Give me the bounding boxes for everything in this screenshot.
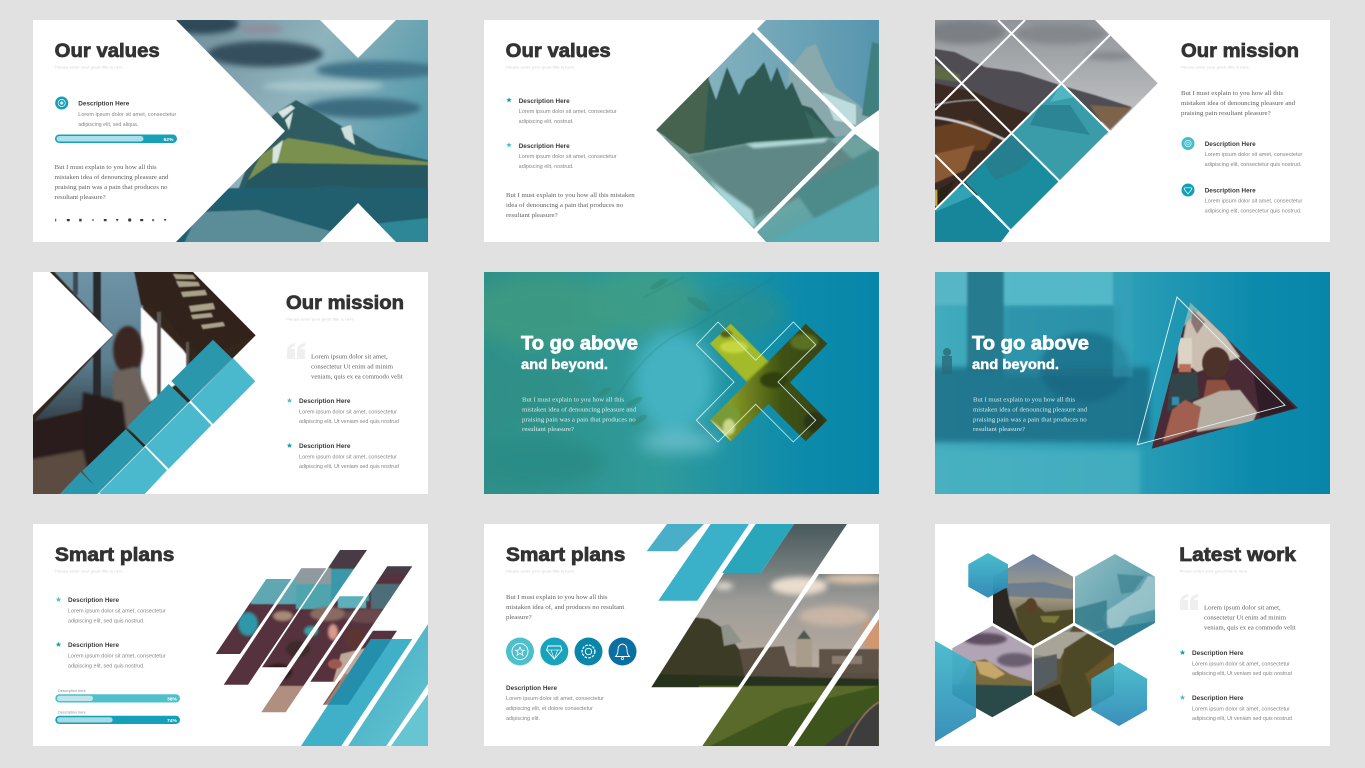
description block two: Description Here [299,443,351,450]
body paragraph [522,396,637,433]
description block one: Description Here [519,98,570,105]
panel: Our values slide with X photo [33,20,428,242]
description block two: adipiscing elit, Ut veniam sed quis nostrud [299,464,399,470]
photo: woman by window [28,267,260,499]
subtitle: Please enter your great title is here [506,568,575,574]
description block one: Description Here [1192,650,1244,657]
background: blurred cafe [925,267,1330,500]
description block one: adipiscing elit, Ut veniam sed quis nostrud [299,419,399,425]
title: Smart plans [506,544,625,566]
triangle outline [1137,297,1285,445]
photo: road and hills in diamond grid [925,15,1162,242]
subtitle: Please enter your great title is here [1180,568,1248,574]
body paragraph: mistaken idea of denouncing pleasure and [1181,100,1296,107]
icon: diamond circle [540,638,568,666]
panel: To go above slide with leaf X [484,272,879,494]
description block two: Lorem ipsum dolor sit amet, consectetur [519,154,617,160]
progress bar 38%: Description here [58,689,86,693]
photo: man with phone in triangle [1152,302,1298,449]
description block two: Description Here [519,143,570,150]
description block one: Lorem ipsum dolor sit amet, consectetur [1192,662,1290,668]
description block [506,685,604,722]
blue parallelograms [647,524,794,601]
quote text: consectetur Ut enim ad minim [311,364,394,370]
icon: star [506,142,512,147]
panel: Smart plans slide with town photo and icon row [484,524,879,746]
body paragraph: But I must explain to you how all this mistaken [506,192,635,199]
subtitle: Please enter your great title is here [55,64,124,70]
heading: To go above [521,332,638,354]
description block one [1192,650,1292,677]
body paragraph [506,192,635,219]
subtitle: Please enter your great title is here [55,568,124,574]
body paragraph [506,594,624,621]
icon: gear circle [574,638,602,666]
quote text: veniam, quis ex ea commodo velit [311,374,403,380]
icon: star [287,443,292,448]
photo hexagon: coast [1032,624,1117,720]
photo: mountain in X cut-out [176,20,428,242]
title: Our mission [1181,40,1299,62]
body paragraph: praising pain was a pain that produces no [522,416,636,424]
overlap of blue strip and photo [328,639,392,705]
body paragraph: pleasure? [506,614,532,621]
photo hexagon: teal stairs [1073,552,1158,648]
body paragraph [973,396,1088,433]
icon: star [287,398,292,403]
icon: star [1180,650,1185,655]
description block one: Lorem ipsum dolor sit amet, consectetur [299,410,397,416]
heading: To go above [972,332,1089,354]
description block [78,101,177,128]
quote text [311,354,403,380]
blue cells over the photo [60,340,232,494]
heading [972,332,1089,372]
panel: To go above slide with triangle photo [935,272,1330,494]
blue hexagon right [1091,662,1147,726]
description block two: adipiscing elit, nostrud. [519,164,574,170]
description block one: adipiscing elit, sed quis nostrud. [68,618,145,624]
X outline [696,322,816,442]
body paragraph: resultant pleasure? [55,194,106,201]
body paragraph: But I must explain to you how all this [522,396,624,404]
photo: town at sunset in slanted strips [644,519,886,750]
photo: cafe in slanted strips [216,550,412,712]
description block: Description Here [78,101,130,108]
icon: star [56,597,61,602]
progress bar 74%: 74% [167,718,177,723]
progress bar 74%: Description here [58,710,86,714]
panel: Our values slide with diamond photo [484,20,879,242]
panel: Our mission slide with woman photo and quote [33,272,428,494]
description block two: Lorem ipsum dolor sit amet, consectetur [68,654,166,660]
description block two: adipiscing elit, Ut veniam sed quis nostrud [1192,716,1292,722]
description block two: Lorem ipsum dolor sit amet, consectetur [1192,706,1290,712]
progress bar 62% [55,134,177,143]
description block one [299,398,399,425]
body paragraph: But I must explain to you how all this [973,396,1075,404]
body paragraph: But I must explain to you how all this [506,594,608,601]
body paragraph: praising pain resultant pleasure? [1181,110,1271,117]
progress bar 38% [55,689,180,702]
subtitle: Please enter your great title is here [1181,64,1250,70]
title: Smart plans [55,544,174,566]
teal overlay cells [935,84,1109,242]
description block two [1205,188,1303,214]
description block one: adipiscing elit, Ut veniam sed quis nostrud [1192,671,1292,677]
description block two [68,642,166,669]
description block one: Lorem ipsum dolor sit amet, consectetur [68,608,166,614]
icon: star [1180,695,1185,700]
description block two: adipiscing elit, sed quis nostrud. [68,663,145,669]
body paragraph: idea of denouncing a pain that produces no [506,202,624,209]
description block: Lorem ipsum dolor sit amet, consectetur [506,696,604,702]
quote text: Lorem ipsum dolor sit amet, [1204,604,1281,612]
description block one [68,597,166,624]
quote text [1204,604,1296,632]
description block one: Lorem ipsum dolor sit amet, consectetur [519,109,617,115]
body paragraph: resultant pleasure? [973,426,1025,433]
description block: adipiscing elit. [506,716,540,722]
heading: and beyond. [972,356,1059,372]
quote text: Lorem ipsum dolor sit amet, [311,354,388,360]
subtitle: Please enter your great title is here [506,64,575,70]
description block two [299,443,399,470]
subtitle: Please enter your great title is here [286,316,355,322]
body paragraph: mistaken idea of denouncing pleasure and [973,406,1088,414]
description block two: Lorem ipsum dolor sit amet, consectetur [1205,198,1303,204]
photo: forest and mountain in diamond cut-out [649,15,884,246]
body paragraph: resultant pleasure? [522,426,574,433]
description block: Lorem ipsum dolor sit amet, consectetur [78,112,177,118]
progress bar 74% [55,710,180,724]
description block two: Description Here [1205,188,1256,194]
description block: adipiscing elit, et dolore consectetur [506,706,593,712]
description block one: Lorem ipsum dolor sit amet, consectetur [1205,152,1303,158]
heading: and beyond. [521,356,608,372]
body paragraph: mistaken idea of, and produces no resultant [506,604,624,611]
body paragraph: praising pain was a pain that produces no [55,184,168,191]
heading [521,332,638,372]
progress bar 62%: 62% [164,137,174,142]
description block one: Description Here [299,398,351,405]
title: Our values [506,40,611,62]
title: Latest work [1179,544,1296,566]
photo: leaves in X shape [710,324,828,442]
icon: quote mark [287,343,305,359]
photo hexagon: canyon [990,552,1075,648]
description block: Description Here [506,685,557,692]
description block two [519,143,617,170]
description block two: Description Here [68,642,119,649]
body paragraph: resultant pleasure? [506,212,558,219]
body paragraph [55,164,169,201]
icon: quote mark [1180,594,1198,610]
description block two: Lorem ipsum dolor sit amet, consectetur [299,454,397,460]
quote text: veniam, quis ex ea commodo velit [1204,624,1296,632]
body paragraph: But I must explain to you how all this [55,164,157,171]
description block one: Description Here [1205,141,1256,148]
body paragraph: praising pain was a pain that produces no [973,416,1087,424]
body paragraph [1181,90,1296,117]
quote text: consectetur Ut enim ad minim [1204,614,1287,622]
description block one: Description Here [68,597,119,604]
description block two [1192,695,1292,722]
blue slanted strips [301,624,428,746]
panel: Smart plans slide with photo strips and bars [33,524,428,746]
white grid lines [935,20,1125,242]
panel: Our mission slide with diamond grid photo [935,20,1330,242]
title: Our values [55,40,160,62]
description block one [519,98,617,125]
progress bar 38%: 38% [167,696,177,701]
icon: bell circle [608,638,636,666]
title: Our mission [286,292,404,314]
panel: Latest work slide with hexagon gallery [935,524,1330,746]
description block one: adipiscing elit, nostrud. [519,119,574,125]
description block two: Description Here [1192,695,1244,702]
blue bar segments over white [99,358,255,494]
icon: target [55,96,68,110]
blue hexagon left [935,641,976,742]
icon: star [56,642,61,647]
social icons row [55,218,166,222]
photo hexagon: mountain [950,624,1035,720]
icon: target [1182,137,1194,150]
body paragraph: mistaken idea of denouncing pleasure and [522,406,637,414]
description block: adipiscing elit, sed aliqua. [78,122,138,128]
body paragraph: mistaken idea of denouncing pleasure and [55,174,169,181]
blue hexagon small [968,553,1008,598]
icon: star [506,97,512,102]
icon: diamond [1182,184,1194,196]
background: blurred foliage [464,272,879,494]
description block two: adipiscing elit, consectetur quis nostrud. [1205,208,1301,214]
description block one [1205,141,1303,168]
body paragraph: But I must explain to you how all this [1181,90,1283,97]
icon: star circle [506,638,534,666]
description block one: adipiscing elit, consectetur quis nostrud. [1205,162,1301,168]
